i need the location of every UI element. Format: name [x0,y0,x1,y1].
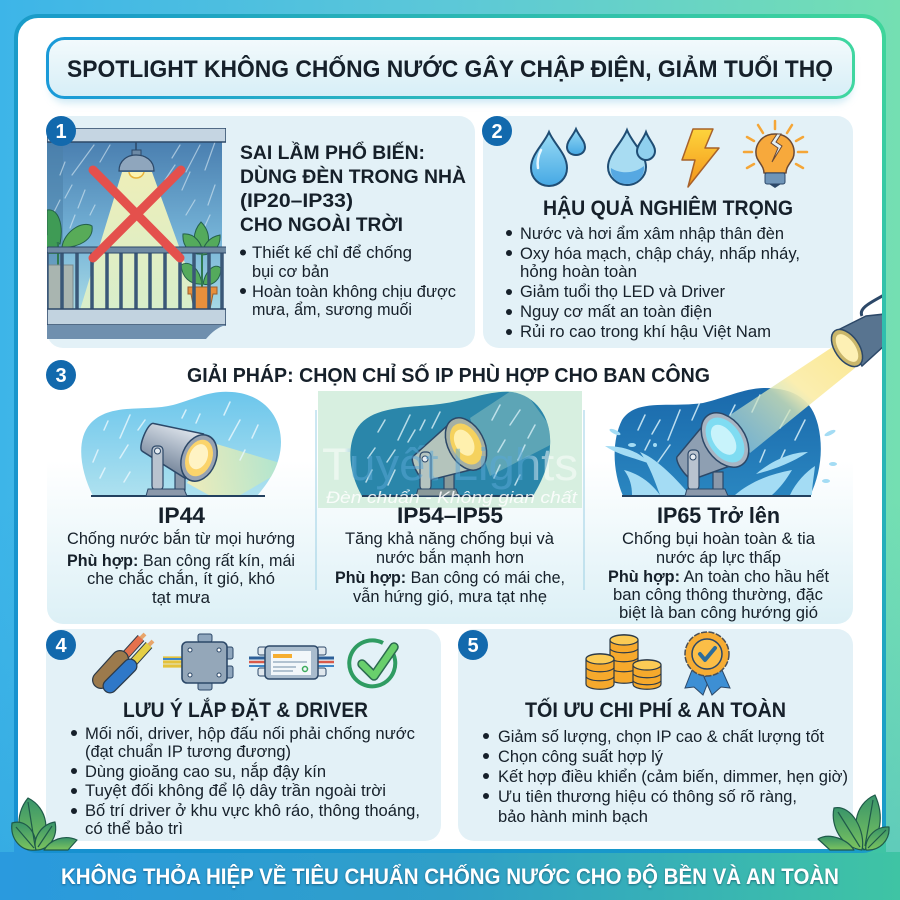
icon: driver [249,646,334,679]
panel 4 badge: 4 [55,635,67,657]
panel 3: IP solutions [46,342,855,624]
water splash [605,428,837,495]
panel 4 bullets: Dùng gioăng cao su, nắp đậy kín [85,762,326,781]
panel 4 bullets: Bố trí driver ở khu vực khô ráo, thông thoáng, [85,801,420,820]
blob scene IP65 [605,388,837,496]
icon: cables [101,634,153,686]
blob scene IP44 [81,392,290,504]
panel 4 heading: LƯU Ý LẮP ĐẶT & DRIVER [123,697,368,722]
panel 5 bullets: Kết hợp điều khiển (cảm biến, dimmer, hẹn giờ) [498,767,848,786]
corner spotlight lamp [830,294,882,368]
panel 2 heading: HẬU QUẢ NGHIÊM TRỌNG [543,195,793,220]
light cone [80,172,202,310]
balcony illustration [47,128,227,339]
text IP65: Chống bụi hoàn toàn & tia [622,529,816,548]
panel 3 badge: 3 [55,365,67,387]
column dividers [316,410,584,590]
text IP65: nước áp lực thấp [656,548,781,567]
pendant lamp [119,142,154,178]
panel 5 heading: TỐI ƯU CHI PHÍ & AN TOÀN [525,696,786,722]
red cross [93,170,181,258]
panel 5 bullets: Ưu tiên thương hiệu có thông số rõ ràng, [498,787,797,806]
text IP54: Phù hợp: Ban công có mái che, [335,568,565,587]
plant: bottom left [12,798,77,850]
icon: junction box [163,634,233,690]
ceiling beam [47,128,226,142]
panel 1 bullets: mưa, ẩm, sương muối [252,300,412,319]
column: IP65 [605,342,855,622]
panel 5 bullets: Giảm số lượng, chọn IP cao & chất lượng tốt [498,727,824,746]
text IP54 [335,503,565,606]
text IP54: Tăng khả năng chống bụi và [345,529,555,548]
panel 1 badge: 1 [55,121,67,143]
text IP65 [608,503,829,622]
watermark text: Tuyết Lights [322,439,578,490]
panel 2 bullets: hỏng hoàn toàn [520,262,637,281]
text IP44: che chắc chắn, ít gió, khó [87,569,275,588]
panel 4 bullets: có thể bảo trì [85,819,183,838]
column: IP54-IP55 [335,385,565,606]
panel 4 bullets: (đạt chuẩn IP tương đương) [85,742,291,761]
panel 5 badge: 5 [467,635,479,657]
text IP44: Phù hợp: Ban công rất kín, mái [67,551,295,570]
panel 5 bullets [483,727,848,826]
icon: medal [685,632,730,695]
text IP44: tạt mưa [152,588,211,607]
text IP44: IP44 [158,503,206,528]
plant: bottom right [818,795,889,850]
spotlight beam from corner lamp [727,342,855,453]
panel 1: common mistake [46,116,475,348]
panel 1 heading: CHO NGOÀI TRỜI [240,212,403,236]
panel 4 bullets [71,724,420,838]
panel 1 badge [46,116,76,146]
panel 2 badge [482,116,512,146]
icon: broken bulb [744,121,807,188]
left plant [47,210,92,311]
panel 2 bullets [506,224,800,341]
text IP65: biệt là ban công hướng gió [619,603,818,622]
text IP54: vẫn hứng gió, mưa tạt nhẹ [353,587,547,606]
footer banner text: KHÔNG THỎA HIỆP VỀ TIÊU CHUẨN CHỐNG NƯỚC CHO ĐỘ BỀN VÀ AN TOÀN [61,863,839,889]
panel 2: consequences [482,116,853,348]
panel 4 bullets: Mối nối, driver, hộp đấu nối phải chống nước [85,724,415,743]
railing [47,247,227,309]
watermark text: Đèn chuẩn - Không gian chất [326,488,578,507]
panel 5 badge [458,630,488,660]
panel 4: installation [46,629,441,841]
panel 1 bullets: Thiết kế chỉ để chống [252,243,412,262]
icon: water drops [531,129,585,186]
panel 1 heading: DÙNG ĐÈN TRONG NHÀ [240,164,466,188]
icon: water drop with moisture [608,130,655,185]
panel 2 bullets: Nước và hơi ẩm xâm nhập thân đèn [520,224,784,243]
spotlight IP54 [403,411,495,496]
text IP44 [67,503,295,607]
watermark backdrop [318,391,582,508]
panel 5: cost and safety [458,629,853,841]
panel 1 bullets: bụi cơ bản [252,262,329,281]
text IP54: nước bắn mạnh hơn [376,548,524,567]
panel 1 bullets: Hoàn toàn không chịu được [252,282,456,301]
panel 2 bullets: Rủi ro cao trong khí hậu Việt Nam [520,322,771,341]
text IP44: Chống nước bắn từ mọi hướng [67,529,295,548]
panel 1 heading: SAI LẦM PHỔ BIẾN: [240,140,425,164]
icon: coins [586,635,661,689]
text IP65: IP65 Trở lên [657,503,780,528]
panel 3 heading: GIẢI PHÁP: CHỌN CHỈ SỐ IP PHÙ HỢP CHO BAN CÔNG [187,363,710,387]
spotlight IP44 [135,413,224,496]
title box: SPOTLIGHT KHÔNG CHỐNG NƯỚC GÂY CHẬP ĐIỆN, GIẢM TUỔI THỌ [67,54,833,83]
panel 5 bullets: bảo hành minh bạch [498,807,648,826]
blob scene IP54 [350,385,560,496]
spotlight IP65 [665,404,759,496]
text IP65: Phù hợp: An toàn cho hầu hết [608,567,829,586]
balcony slab [47,309,226,325]
column: IP44 [67,392,295,607]
panel 1 bullets [240,243,456,319]
panel 2 bullets: Oxy hóa mạch, chập cháy, nhấp nháy, [520,244,800,263]
icon: green check [349,640,395,686]
panel 5 bullets: Chọn công suất hợp lý [498,747,663,766]
panel 1 heading: (IP20–IP33) [240,190,353,212]
panel 1 heading [240,140,466,236]
title box [48,38,854,103]
panel 2 badge: 2 [491,121,503,143]
text IP54: IP54–IP55 [397,503,503,528]
panel 3 badge [46,360,76,390]
panel 4 bullets: Tuyệt đối không để lộ dây trần ngoài trời [85,781,386,800]
icon: lightning bolt [682,129,719,187]
panel 2 bullets: Nguy cơ mất an toàn điện [520,302,712,321]
text IP65: ban công thông thường, đặc [613,585,823,604]
panel 2 bullets: Giảm tuổi thọ LED và Driver [520,282,725,301]
panel 4 badge [46,630,76,660]
right plant [181,222,221,309]
